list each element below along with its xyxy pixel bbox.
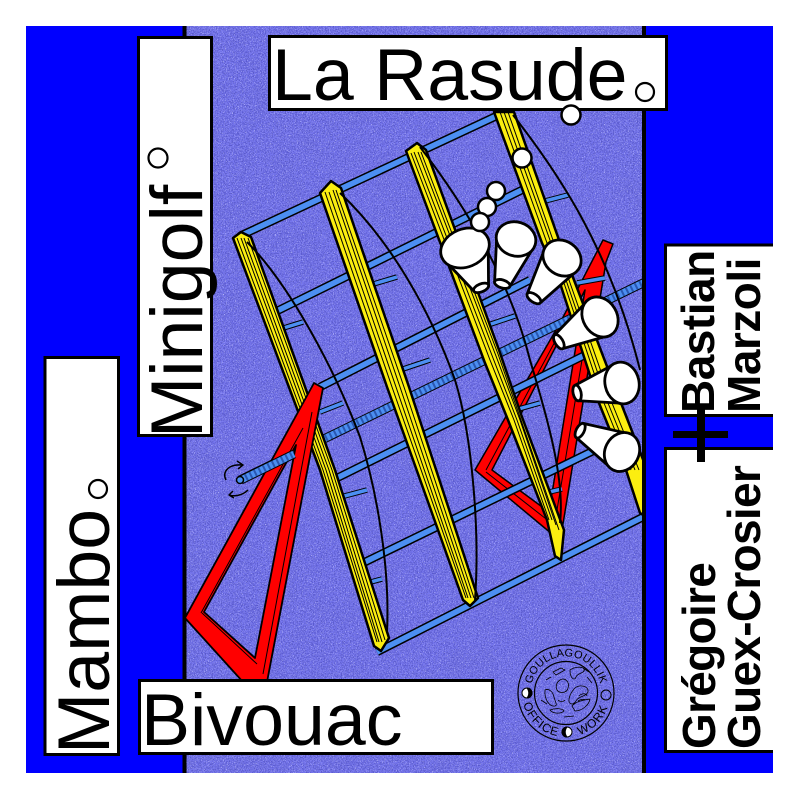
yellow beam 1 bbox=[233, 232, 389, 651]
cone 1 bbox=[439, 226, 491, 294]
cone 3 bbox=[526, 238, 582, 306]
cone 5 bbox=[571, 360, 641, 406]
label box: Mambo bbox=[42, 358, 125, 754]
Guex-Crosier text: Guex-Crosier bbox=[718, 465, 770, 749]
cone 6 bbox=[574, 422, 642, 473]
cone 2 bbox=[493, 220, 538, 290]
label box: Bivouac bbox=[140, 678, 492, 761]
Mambo text: Mambo bbox=[42, 509, 125, 754]
label box: Minigolf bbox=[135, 38, 218, 438]
Bastian text: Bastian bbox=[672, 250, 724, 413]
title bubble: Minigolf bbox=[148, 148, 168, 168]
Minigolf text: Minigolf bbox=[135, 184, 218, 438]
yellow beam 2 bbox=[320, 181, 478, 606]
La Rasude text: La Rasude bbox=[272, 33, 628, 116]
title bubble: La Rasude bbox=[636, 83, 654, 101]
rope passing over the big frame bbox=[236, 454, 294, 484]
Marzoli text: Marzoli bbox=[718, 258, 770, 413]
twisted rope rod bbox=[240, 282, 645, 480]
Bivouac text: Bivouac bbox=[141, 678, 402, 761]
yellow beam 3 bbox=[406, 143, 564, 560]
Grégoire text: Grégoire bbox=[673, 563, 725, 749]
planet contour lines bbox=[541, 667, 592, 717]
stamp moons bbox=[522, 688, 611, 737]
label box: Grégoire Guex-Crosier bbox=[666, 448, 773, 752]
cone 4 bbox=[552, 296, 620, 350]
title bubble: Mambo bbox=[89, 480, 107, 498]
small red triangle frame bbox=[475, 240, 613, 534]
stamp bottom lettering right: WORK bbox=[576, 704, 608, 734]
icon: rotation arrows bbox=[225, 461, 248, 498]
illustration: rotating frame bbox=[185, 112, 651, 682]
label box: Bastian Marzoli bbox=[666, 245, 773, 416]
yellow beam 4 bbox=[494, 112, 651, 520]
stamp top lettering: GOULLAGOULLIK bbox=[525, 648, 608, 684]
stamp: Goullagoullik office work bbox=[517, 644, 615, 742]
plus sign bbox=[673, 405, 728, 462]
textured central panel bbox=[182, 26, 646, 773]
curved black arcs bbox=[247, 115, 640, 632]
blue horizontal rods bbox=[240, 112, 645, 652]
bubbles rising from the cones bbox=[471, 106, 580, 231]
big red triangle frame bbox=[185, 383, 323, 682]
stamp bottom lettering left: OFFICE bbox=[524, 702, 558, 736]
label box: La Rasude bbox=[270, 33, 666, 116]
